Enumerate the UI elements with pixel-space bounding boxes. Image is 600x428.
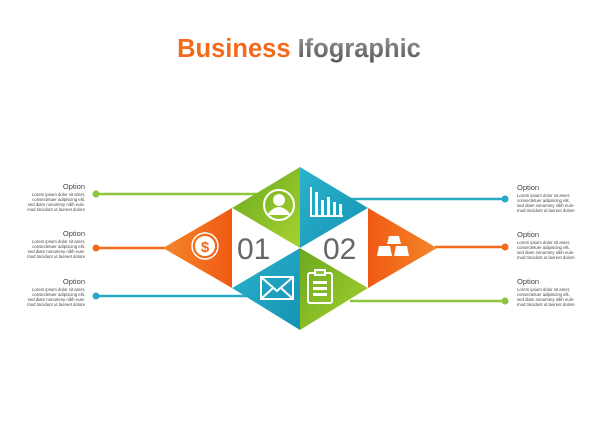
connector lines xyxy=(92,190,508,304)
text blocks right: consectetuer adipiscing elit, xyxy=(517,198,570,203)
icon: person xyxy=(264,190,294,220)
text blocks right: mod tincidunt ut laoreet dolore xyxy=(517,208,575,213)
numbers: 01 xyxy=(237,233,270,266)
title: Business Ifographic xyxy=(177,35,421,63)
text blocks right: Option xyxy=(517,277,539,286)
text blocks left: consectetuer adipiscing elit, xyxy=(32,197,85,202)
text blocks right xyxy=(517,183,575,307)
text blocks left: Lorem ipsum dolor sit amet, xyxy=(32,239,85,244)
diamond xyxy=(163,167,437,330)
text blocks left: Option xyxy=(63,229,85,238)
text blocks right: consectetuer adipiscing elit, xyxy=(517,292,570,297)
text blocks right: Option xyxy=(517,183,539,192)
text blocks left xyxy=(27,182,86,307)
text blocks right: sed diam nonummy nibh euis- xyxy=(517,297,575,302)
icon: bar chart xyxy=(310,187,343,217)
text blocks left: sed diam nonummy nibh euis- xyxy=(28,297,86,302)
text blocks left: mod tincidunt ut laoreet dolore xyxy=(27,254,86,259)
text blocks right: Lorem ipsum dolor sit amet, xyxy=(517,193,570,198)
icon: clipboard xyxy=(308,270,332,303)
text blocks left: Lorem ipsum dolor sit amet, xyxy=(32,192,85,197)
text blocks left: Option xyxy=(63,277,85,286)
text blocks left: mod tincidunt ut laoreet dolore xyxy=(27,302,86,307)
text blocks right: sed diam nonummy nibh euis- xyxy=(517,250,575,255)
text blocks right: Lorem ipsum dolor sit amet, xyxy=(517,287,570,292)
text blocks left: Lorem ipsum dolor sit amet, xyxy=(32,287,85,292)
text blocks left: sed diam nonummy nibh euis- xyxy=(28,202,86,207)
numbers: 02 xyxy=(323,233,356,266)
icon: dollar: $ xyxy=(201,239,210,256)
text blocks right: mod tincidunt ut laoreet dolore xyxy=(517,302,575,307)
text blocks left: consectetuer adipiscing elit, xyxy=(32,244,85,249)
text blocks right: sed diam nonummy nibh euis- xyxy=(517,203,575,208)
icon: dollar xyxy=(192,233,218,259)
text blocks right: Lorem ipsum dolor sit amet, xyxy=(517,240,570,245)
text blocks right: consectetuer adipiscing elit, xyxy=(517,245,570,250)
text blocks left: consectetuer adipiscing elit, xyxy=(32,292,85,297)
text blocks right: mod tincidunt ut laoreet dolore xyxy=(517,255,575,260)
text blocks left: Option xyxy=(63,182,85,191)
numbers xyxy=(237,233,356,266)
icon: envelope xyxy=(261,277,293,299)
text blocks left: mod tincidunt ut laoreet dolore xyxy=(27,207,86,212)
icon: gold bars xyxy=(377,236,409,256)
text blocks left: sed diam nonummy nibh euis- xyxy=(28,249,86,254)
text blocks right: Option xyxy=(517,230,539,239)
